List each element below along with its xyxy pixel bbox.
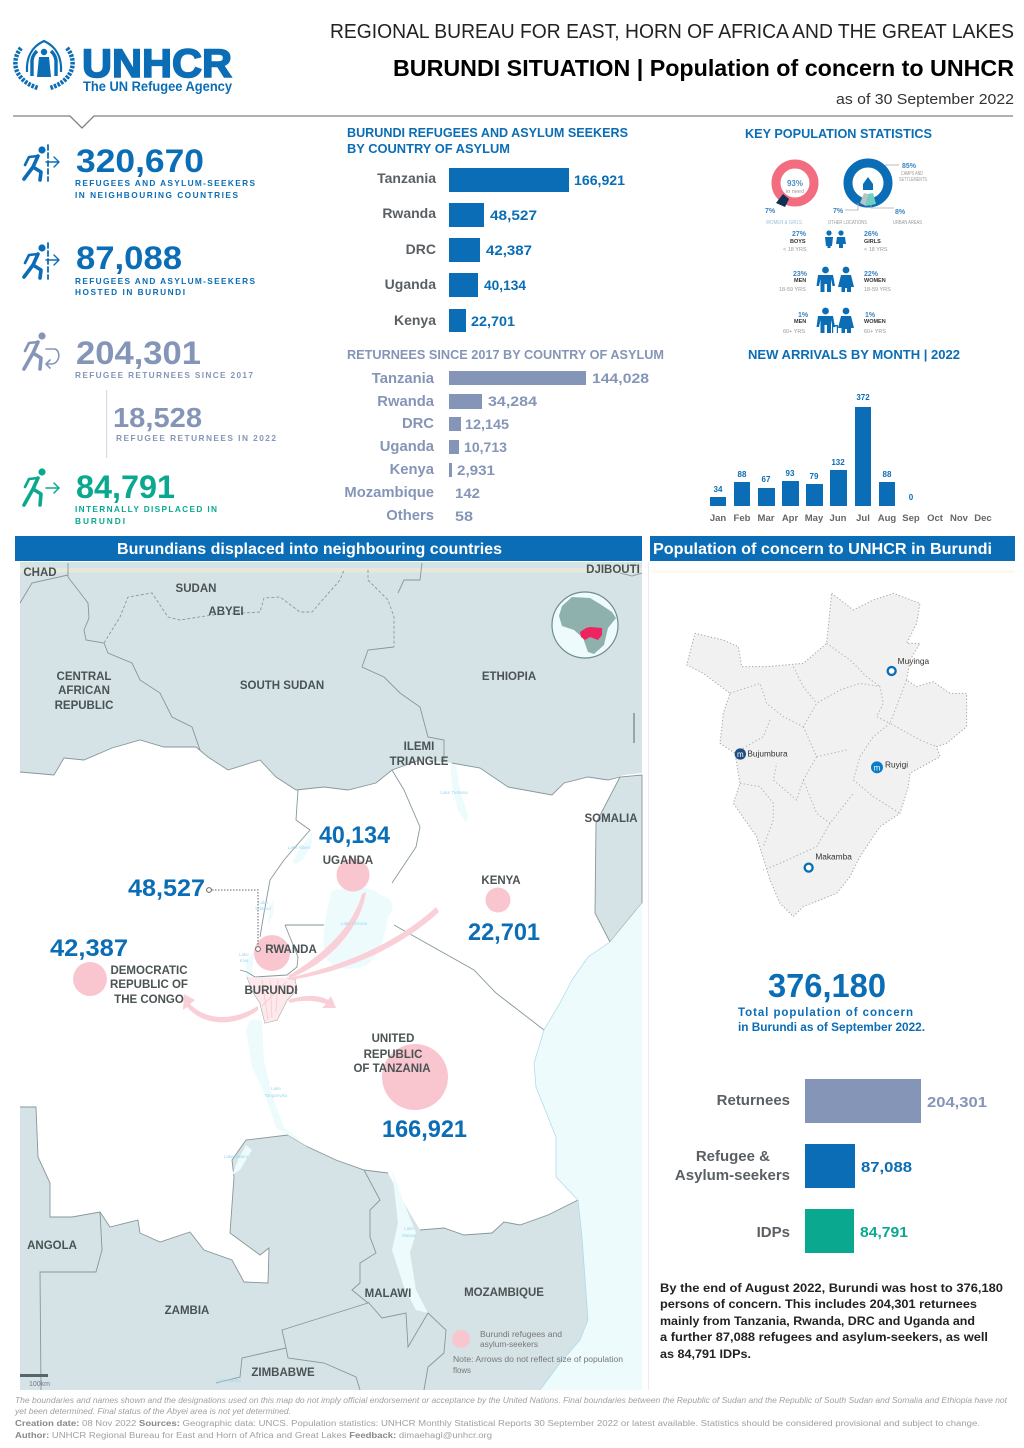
country labels: AFRICAN [58,685,110,697]
map legend [452,1330,623,1375]
demographics: children [783,230,888,253]
demographics: adults [779,267,891,293]
donut: settlement type 85% [828,163,927,226]
scale bar: 100km [29,1381,50,1388]
total population of concern: 376,180 [768,967,886,1004]
total population of concern [738,967,925,1034]
icon: displaced person [24,468,59,505]
bar chart: new arrivals by month: Jun [830,513,847,524]
donut: gender split 93% [765,164,814,226]
panel header: population of concern: Population of concern to UNHCR in Burundi [653,541,992,558]
summary paragraph: mainly from Tanzania, Rwanda, DRC and Uganda and [660,1314,975,1328]
country labels: UGANDA [323,855,373,867]
summary paragraph: a further 87,088 refugees and asylum-seekers, as well [660,1330,988,1344]
bar chart: returnees by country of asylum: DRC [402,416,434,432]
lakes [232,763,468,1313]
bar chart: refugees by country of asylum: 48,527 [490,207,537,223]
stat: refugee returnees in 2022 [106,390,276,458]
bar chart: new arrivals by month: 88 [883,470,892,479]
bar chart: refugees by country of asylum: 22,701 [471,313,515,329]
country labels: REPUBLIC [364,1049,422,1061]
demographics: children: 27% [792,231,807,238]
stat: refugee returnees since 2017: REFUGEE RETURNEES SINCE 2017 [75,370,253,380]
bar chart: new arrivals by month: 79 [810,472,819,481]
bar chart: new arrivals by month [710,348,992,524]
location: Muyinga [888,656,929,675]
location: Bujumbura: Bujumbura [747,749,788,759]
demographics: elders: MEN [794,319,806,325]
bar chart: returnees by country of asylum: Tanzania [372,371,435,387]
bar chart: new arrivals by month: NEW ARRIVALS BY MONTH | 2022 [748,348,960,362]
stat: refugee returnees since 2017 [24,332,253,380]
donut: settlement type 85%: 7% [833,208,844,215]
bar chart: returnees by country of asylum: Rwanda [377,394,435,410]
demographics: elders: WOMEN [864,319,886,325]
country labels: ILEMI [404,741,434,753]
country labels: KENYA [481,875,521,887]
icon: person crossing border [24,243,59,279]
country labels [23,564,640,1379]
location: Ruyigi: m [874,763,881,772]
bar chart: new arrivals by month: 372 [856,393,870,402]
heading [347,126,628,156]
bar chart: new arrivals by month: Dec [974,513,992,524]
country shape [687,593,967,917]
bar chart: population of concern: IDPs [757,1224,790,1241]
bar chart: returnees by country of asylum: Mozambique [344,485,434,501]
dotted leader: Rwanda [207,888,260,951]
lake labels: Lake Turkana [440,790,468,795]
stat: refugees hosted in Burundi: 87,088 [76,240,182,276]
bar chart: new arrivals by month: 88 [738,470,747,479]
northern neighbours land [20,562,642,795]
bar chart: new arrivals by month: 67 [762,475,771,484]
bar chart: new arrivals by month: 34 [714,485,723,494]
lake labels: Lake [239,952,249,957]
bar chart: new arrivals by month: Oct [927,513,944,524]
bar chart: population of concern: Asylum-seekers [675,1167,790,1184]
demographics: children: < 18 YRS [864,247,888,253]
bar chart: returnees by country of asylum: 142 [455,485,480,501]
value labels: 22,701 [468,919,540,946]
donut: settlement type 85%: URBAN AREAS [893,220,922,226]
value labels [50,822,540,1143]
value labels: 48,527 [128,875,205,902]
location: Bujumbura [735,748,788,760]
southern neighbours land [20,1107,588,1390]
donut: settlement type 85%: OTHER LOCATIONS [828,220,867,226]
inset globe [552,592,618,658]
bar chart: new arrivals by month: Feb [734,513,751,524]
demographics: children: < 18 YRS [783,247,807,253]
country borders [20,563,642,1390]
demographics: adults: MEN [794,278,806,284]
footer notes [14,1396,1008,1440]
bar chart: population of concern: 204,301 [927,1094,987,1111]
demographics: adults: 22% [864,271,879,278]
bar chart: new arrivals by month: Sep [902,513,920,524]
location: Ruyigi: Ruyigi [885,760,908,770]
summary paragraph [660,1281,1003,1361]
title block: as of 30 September 2022 [836,91,1014,108]
demographics: adults: 23% [793,271,808,278]
lake labels: Lake Kariba [217,1378,241,1383]
demographics: elders: 1% [798,312,809,319]
flow arrows [183,892,439,1022]
demographics: elders: 60+ YRS [783,329,805,335]
bar chart: population of concern: 84,791 [860,1224,908,1241]
province boundaries [730,643,937,870]
demographics: adults: 18-59 YRS [779,287,806,293]
country labels: OF TANZANIA [353,1063,431,1075]
bar chart: refugees by country of asylum: 40,134 [484,277,526,293]
country labels: MOZAMBIQUE [464,1287,544,1299]
footer notes: Creation date: 08 Nov 2022 Sources: Geographic data: UNCS. Population statistics: UNHCR Monthly Statistical Reports 30 September 2022 or latest available. Statistics should be considered provisional and subject to change. [15,1419,980,1428]
demographics: elders: 60+ YRS [864,329,886,335]
country labels: CENTRAL [57,671,111,683]
value labels: 42,387 [50,935,128,962]
logo: UNHCR: UNHCR [82,42,232,86]
bar chart: new arrivals by month: Apr [782,513,798,524]
country labels: DJIBOUTI [586,564,640,576]
bar chart: returnees by country of asylum: Kenya [390,462,435,478]
country labels: BURUNDI [244,985,298,997]
map legend: Burundi refugees and [480,1330,562,1339]
Burundi map [687,593,967,917]
demographics: elders: 1% [865,312,876,319]
Somalia land [595,775,642,942]
value labels: 40,134 [319,822,391,849]
country labels: REPUBLIC OF [110,979,188,991]
key population statistics [745,127,932,335]
map legend: asylum-seekers [480,1340,538,1349]
country labels: ZAMBIA [165,1305,209,1317]
footer notes: The boundaries and names shown and the designations used on this map do not imply official endorsement or acceptance by the United Nations. Final boundaries between the Republic of Sudan and the Republic of South Sudan and Somalia and Ethiopia have not [15,1396,1008,1405]
key population statistics: KEY POPULATION STATISTICS [745,127,932,141]
panel header: Burundians displaced: Burundians displaced into neighbouring countries [117,541,502,558]
stat: refugees hosted in Burundi [24,240,255,297]
bar chart: new arrivals by month: Aug [878,513,896,524]
heading: BY COUNTRY OF ASYLUM [347,142,510,156]
location: Bujumbura: m [737,750,744,759]
bar chart: returnees by country of asylum: Others [386,508,434,524]
lake labels: Edward [255,906,271,911]
panel header: population of concern [650,536,1015,561]
lake labels: Lake [258,900,268,905]
stat: internally displaced [24,468,217,526]
country labels: CHAD [23,567,57,579]
bar chart: new arrivals by month: Jul [856,513,870,524]
bar chart: refugees by country of asylum: 166,921 [574,172,625,188]
bar chart: returnees by country of asylum: 34,284 [488,393,537,409]
stat: refugees in neighbouring countries: IN NEIGHBOURING COUNTRIES [75,190,238,200]
bar chart: new arrivals by month: 93 [786,469,795,478]
donut: gender split 93%: in need [786,189,804,195]
bar chart: returnees by country of asylum: Uganda [380,439,435,455]
country labels: THE CONGO [114,994,184,1006]
footer notes: yet been determined. Final status of the Abyei area is not yet determined. [14,1407,291,1416]
lake labels: Lake Victoria [341,921,367,926]
bar chart: refugees by country of asylum: Tanzania [377,170,436,186]
stat: internally displaced: INTERNALLY DISPLACED IN [75,504,217,514]
bar chart: population of concern: Refugee & [696,1148,770,1165]
bar chart: new arrivals by month: 132 [831,458,845,467]
sea [534,903,642,1390]
bar chart: new arrivals by month: Mar [758,513,775,524]
total population of concern: in Burundi as of September 2022. [738,1022,925,1034]
bar chart: returnees by country of asylum: 58 [455,508,473,524]
lake labels: Lake Albert [288,845,311,850]
country labels: UNITED [372,1033,414,1045]
lake labels: Lake [271,1086,281,1091]
donut: gender split 93%: 7% [765,208,776,215]
stat: refugee returnees in 2022: REFUGEE RETURNEES IN 2022 [116,433,276,443]
stat: refugee returnees in 2022: 18,528 [113,402,202,433]
total population of concern: Total population of concern [738,1007,913,1019]
donut: gender split 93%: WOMEN & GIRLS [766,220,802,226]
title block: BURUNDI SITUATION | Population of concern to UNHCR [393,55,1014,81]
heading: BURUNDI REFUGEES AND ASYLUM SEEKERS [347,126,628,140]
lake labels: Malawi [402,1233,416,1238]
stat: refugee returnees since 2017: 204,301 [76,335,201,371]
bar chart: returnees by country of asylum: 2,931 [457,462,495,478]
donut: settlement type 85%: 8% [895,209,906,216]
summary paragraph: persons of concern. This includes 204,301 returnees [660,1297,977,1311]
country labels: SOUTH SUDAN [240,680,324,692]
stat: internally displaced: 84,791 [76,469,175,505]
bar chart: returnees by country of asylum: RETURNEES SINCE 2017 BY COUNTRY OF ASYLUM [347,348,664,362]
bar chart: refugees by country of asylum: DRC [406,241,436,257]
bar chart: refugees by country of asylum [347,126,628,332]
country labels: SOMALIA [584,813,638,825]
country labels: ANGOLA [27,1240,77,1252]
map legend: Note: Arrows do not reflect size of population [453,1355,623,1364]
bar chart: population of concern: Returnees [717,1092,790,1109]
demographics: children: BOYS [790,239,806,245]
population circles [73,858,510,1110]
country labels: ZIMBABWE [251,1367,315,1379]
stat: refugees in neighbouring countries [24,143,255,200]
country labels: REPUBLIC [55,700,113,712]
donut: settlement type 85%: CAMPS AND [901,171,923,177]
country labels: MALAWI [365,1288,411,1300]
stat: internally displaced: BURUNDI [75,516,125,526]
donut: settlement type 85%: 85% [902,163,917,170]
bar chart: new arrivals by month: Jan [710,513,726,524]
bar chart: refugees by country of asylum: Uganda [385,276,436,292]
location: Ruyigi [871,760,908,773]
bar chart: new arrivals by month: May [805,513,824,524]
demographics: children: 26% [864,231,879,238]
regional map [20,562,642,1390]
stat: refugees in neighbouring countries: REFUGEES AND ASYLUM-SEEKERS [75,178,255,188]
scale bar [20,1374,50,1388]
logo: UNHCR: The UN Refugee Agency [83,79,232,94]
donut: settlement type 85%: SETTLEMENTS [899,177,927,183]
demographics: elders [783,308,886,335]
donut: gender split 93%: 93% [787,179,803,188]
bar chart: refugees by country of asylum: Kenya [394,312,436,328]
location: Muyinga: Muyinga [898,656,929,666]
panel header: Burundians displaced [15,536,642,561]
country labels: ABYEI [208,606,244,618]
hatched Burundi [247,977,297,1023]
demographics: children: GIRLS [864,239,881,245]
demographics: adults: 18-59 YRS [864,287,891,293]
country labels: RWANDA [265,944,317,956]
bar chart: new arrivals by month: Nov [950,513,969,524]
title block [330,21,1014,108]
bar chart: refugees by country of asylum: 42,387 [486,242,532,258]
bar chart: population of concern: 87,088 [861,1159,912,1176]
location: Makamba [805,851,852,872]
value labels: 166,921 [382,1116,467,1143]
bar chart: returnees by country of asylum [344,348,664,524]
summary paragraph: as 84,791 IDPs. [660,1347,751,1361]
bar chart: returnees by country of asylum: 144,028 [592,370,649,386]
bar chart: refugees by country of asylum: Rwanda [382,205,436,221]
footer notes: Author: UNHCR Regional Bureau for East and Horn of Africa and Great Lakes Feedback: dimaehagl@unhcr.org [15,1431,492,1440]
stat: refugees hosted in Burundi: REFUGEES AND ASYLUM-SEEKERS [75,276,255,286]
lake labels: Lake Mweru [224,1154,249,1159]
location: Makamba: Makamba [815,851,852,861]
bar chart: returnees by country of asylum: 10,713 [464,439,507,455]
bar chart: returnees by country of asylum: 12,145 [465,416,509,432]
bar chart: new arrivals by month: 0 [909,493,914,502]
title block: REGIONAL BUREAU FOR EAST, HORN OF AFRICA AND THE GREAT LAKES [330,21,1014,43]
icon: UNHCR emblem [15,41,73,88]
country labels: SUDAN [176,583,216,595]
country labels: DEMOCRATIC [110,965,188,977]
stat: refugees hosted in Burundi: HOSTED IN BURUNDI [75,287,185,297]
summary paragraph: By the end of August 2022, Burundi was host to 376,180 [660,1281,1003,1295]
icon: person returning [24,332,59,369]
lake labels: Kivu [240,958,249,963]
demographics: adults: WOMEN [864,278,886,284]
lake labels [217,790,468,1383]
map legend: flows [453,1366,471,1375]
stat: refugees in neighbouring countries: 320,670 [76,143,204,179]
country labels: TRIANGLE [390,756,449,768]
lake labels: Tanganyika [265,1093,288,1098]
country labels: ETHIOPIA [482,671,536,683]
lake labels: Lake [404,1226,414,1231]
icon: person crossing border [24,145,59,181]
logo: UNHCR [15,41,232,94]
bar chart: population of concern [675,1079,987,1253]
